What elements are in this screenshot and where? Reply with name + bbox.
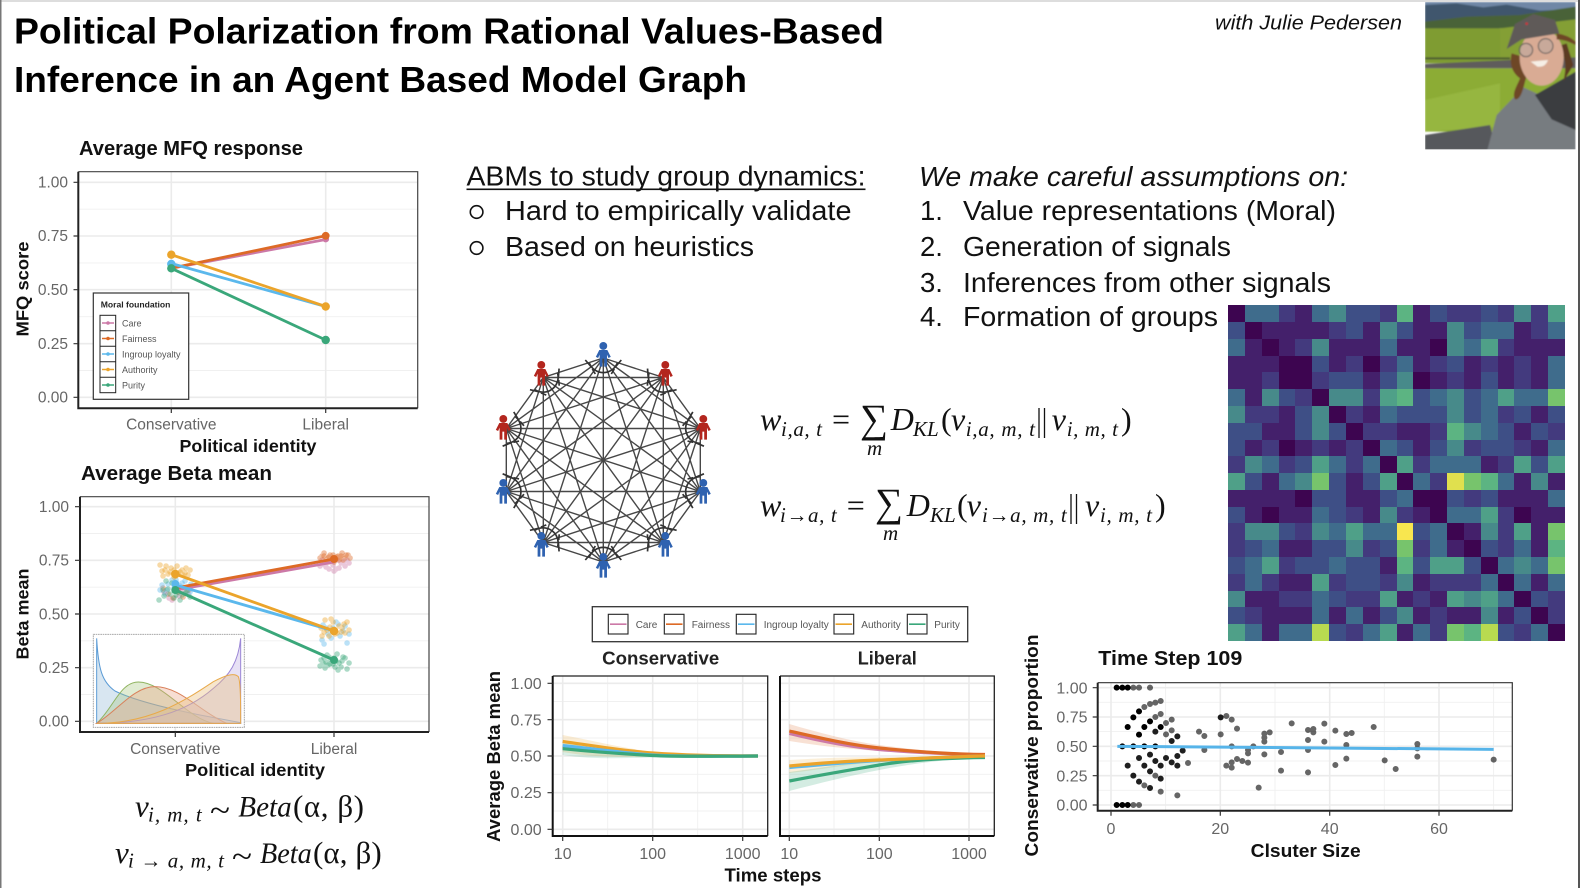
legend: moral foundation: Authority [122, 365, 158, 375]
chart: Average Beta mean: 1.00 [39, 499, 69, 516]
facet titles: Liberal [858, 648, 917, 668]
formula: edge weight: ∑ [860, 396, 888, 441]
formula: inferred edge weight: m [883, 521, 898, 545]
text block: assumptions: 1. [920, 195, 943, 226]
mean lines [171, 555, 338, 664]
formula: value distribution: v [135, 789, 149, 824]
text block: ABMs [466, 160, 866, 262]
y axis label: Beta mean [12, 568, 32, 660]
text block: assumptions: Formation of groups [963, 301, 1218, 332]
collaborator credit: with Julie Pedersen [1215, 12, 1402, 34]
formula: value distribution: (α, β) [293, 789, 364, 824]
chart title: Average Beta mean [81, 463, 272, 485]
chart: Average Beta mean: Liberal [311, 741, 357, 758]
legend: moral foundations: Care [636, 620, 658, 631]
y axis label: Conservative proportion [1022, 635, 1042, 856]
chart: Average MFQ response: 0.75 [38, 228, 68, 245]
formula: edge weight: ( [941, 401, 952, 437]
formula: edge weight: m [867, 436, 882, 460]
y axis label: Average Beta mean [484, 671, 504, 842]
formula: inferred edge weight: v [1085, 487, 1100, 523]
formula: edge weight: w [760, 401, 782, 437]
formula: edge weight: KL [912, 417, 939, 441]
formula: inferred value distribution: Beta [260, 837, 312, 870]
formula: inferred value distribution: ~ [232, 838, 252, 874]
scatter points [1117, 688, 1494, 805]
text block: ABMs: Hard to empirically validate [505, 195, 852, 226]
chart: cluster scatter plot: 0.25 [1056, 768, 1088, 786]
formula: edge weight: i,a, t [781, 417, 823, 441]
text block: ABMs: Based on heuristics [505, 231, 754, 262]
formula: inferred edge weight: ) [1155, 487, 1166, 523]
network graph of agents [496, 342, 711, 578]
lines [167, 232, 330, 344]
text block: assumptions: 4. [920, 301, 943, 332]
text block: assumptions [919, 161, 1348, 332]
chart: cluster scatter plot: 0 [1107, 821, 1116, 838]
legend: moral foundations: Fairness [692, 620, 730, 631]
formula: edge weight: i, m, t [1067, 417, 1119, 441]
formula: inferred edge weight: i→a, m, t [982, 503, 1068, 527]
chart: cluster scatter plot: 20 [1211, 821, 1229, 838]
chart: average beta mean over time: 100 [639, 846, 666, 863]
legend: moral foundation: Care [122, 318, 142, 328]
panel: liberal [780, 676, 994, 841]
formula: value distribution [135, 789, 364, 828]
legend: moral foundations: Authority [861, 620, 901, 631]
jittered points [159, 553, 350, 670]
photo of Julie Pedersen [1425, 2, 1576, 150]
x axis label: Political identity [180, 436, 317, 456]
formula: inferred edge weight: i, m, t [1100, 503, 1153, 527]
formula: edge weight [760, 396, 1132, 460]
chart title: Time Step 109 [1098, 648, 1242, 670]
chart: cluster scatter plot: 0.50 [1056, 739, 1088, 756]
title [14, 10, 884, 100]
formula: edge weight: v [951, 401, 966, 437]
title: Inference in an Agent Based Model Graph [14, 59, 747, 100]
text block: assumptions: Inferences from other signals [963, 267, 1331, 298]
chart: average beta mean over time: 100 [866, 846, 893, 863]
chart: average beta mean over time: 0.25 [511, 785, 542, 802]
chart: cluster scatter plot: 60 [1430, 821, 1448, 838]
formula: edge weight: D [890, 401, 914, 437]
chart: Average Beta mean: 0.25 [39, 660, 69, 677]
formula: inferred value distribution: v [115, 835, 129, 870]
formula: value distribution: ~ [210, 792, 230, 828]
chart: Average MFQ response [12, 138, 418, 456]
chart: cluster scatter plot: 40 [1321, 821, 1339, 838]
formula: inferred edge weight: KL [929, 503, 956, 527]
legend: moral foundation: Ingroup loyalty [122, 350, 181, 360]
chart: average beta mean over time: 0.00 [511, 822, 542, 839]
chart: average beta mean over time: 10 [780, 846, 798, 863]
chart: Average Beta mean: 0.00 [39, 714, 69, 730]
legend: moral foundations: Purity [934, 620, 960, 631]
chart: average beta mean over time: 0.50 [511, 748, 542, 766]
formula: value distribution: Beta [238, 791, 292, 824]
y axis label: MFQ score [12, 241, 32, 336]
text block: assumptions: 2. [920, 231, 943, 262]
formula: inferred value distribution: i → a, m, t [128, 849, 225, 873]
chart: average beta mean over time: 1000 [951, 846, 987, 863]
inset: beta distributions [93, 634, 244, 727]
chart: average beta mean over time: 10 [554, 846, 572, 863]
facet titles [602, 648, 917, 668]
chart: Average MFQ response: 0.50 [38, 282, 68, 299]
legend: moral foundation: Purity [122, 380, 146, 390]
chart: average beta mean over time: 1.00 [511, 676, 542, 693]
formula: inferred edge weight [760, 480, 1166, 545]
legend: moral foundations: Ingroup loyalty [764, 620, 829, 631]
chart title: Average MFQ response [79, 138, 303, 160]
chart: cluster scatter plot: 0.75 [1056, 710, 1088, 726]
legend: moral foundation: Moral foundation [101, 300, 170, 310]
legend: moral foundation [93, 293, 189, 399]
chart: Average MFQ response: 0.00 [38, 390, 68, 406]
chart: cluster scatter plot: 0.00 [1056, 798, 1088, 814]
text block: assumptions: We make careful assumptions on: [919, 161, 1348, 192]
chart: Average Beta mean: 0.50 [39, 606, 69, 624]
x axis label: Political identity [185, 760, 325, 780]
formula: inferred edge weight: D [906, 487, 930, 523]
chart: Average MFQ response: 0.25 [38, 336, 68, 353]
chart: cluster scatter plot [1022, 634, 1512, 861]
chart: Average Beta mean: 0.75 [39, 552, 69, 570]
chart: Average MFQ response: Liberal [302, 416, 349, 434]
formula: edge weight: ) [1121, 401, 1132, 437]
title: Political Polarization from Rational Values-Based [14, 10, 884, 52]
x axis label: Time steps [724, 866, 822, 886]
chart: cluster scatter plot: 1.00 [1056, 680, 1088, 698]
legend: moral foundation: Fairness [122, 334, 157, 344]
chart: average beta mean over time: 1000 [725, 846, 761, 863]
formula: edge weight: v [1052, 401, 1067, 437]
formula: edge weight: = [832, 401, 850, 437]
chart: Average Beta mean: Conservative [130, 741, 221, 758]
text block: assumptions: Value representations (Moral) [963, 195, 1336, 226]
facet titles: Conservative [602, 648, 719, 668]
heatmap [1228, 305, 1565, 641]
formula: edge weight: i,a, m, t [966, 417, 1036, 441]
formula: inferred value distribution: (α, β) [313, 835, 382, 870]
formula: value distribution: i, m, t [148, 803, 203, 827]
chart: average beta mean over time: 0.75 [511, 712, 542, 730]
text block: assumptions: Generation of signals [963, 231, 1231, 262]
chart: Average MFQ response: 1.00 [38, 174, 68, 192]
formula: inferred edge weight: w [760, 487, 782, 523]
text block: ABMs: ABMs to study group dynamics: [466, 160, 866, 192]
text block: assumptions: 3. [920, 267, 943, 298]
formula: inferred edge weight: ( [957, 487, 968, 523]
formula: inferred edge weight: = [847, 487, 865, 523]
formula: inferred edge weight: v [967, 487, 982, 523]
x axis label: Clsuter Size [1251, 840, 1361, 861]
chart: Average MFQ response: Conservative [126, 416, 217, 434]
formula: inferred edge weight: ∑ [875, 480, 903, 525]
chart: average beta mean over time [484, 607, 994, 886]
panel: conservative [548, 676, 768, 841]
chart: Average Beta mean [12, 463, 429, 780]
legend: moral foundations [592, 607, 968, 642]
formula: inferred value distribution [115, 835, 382, 874]
formula: inferred edge weight: i→a, t [780, 503, 838, 527]
